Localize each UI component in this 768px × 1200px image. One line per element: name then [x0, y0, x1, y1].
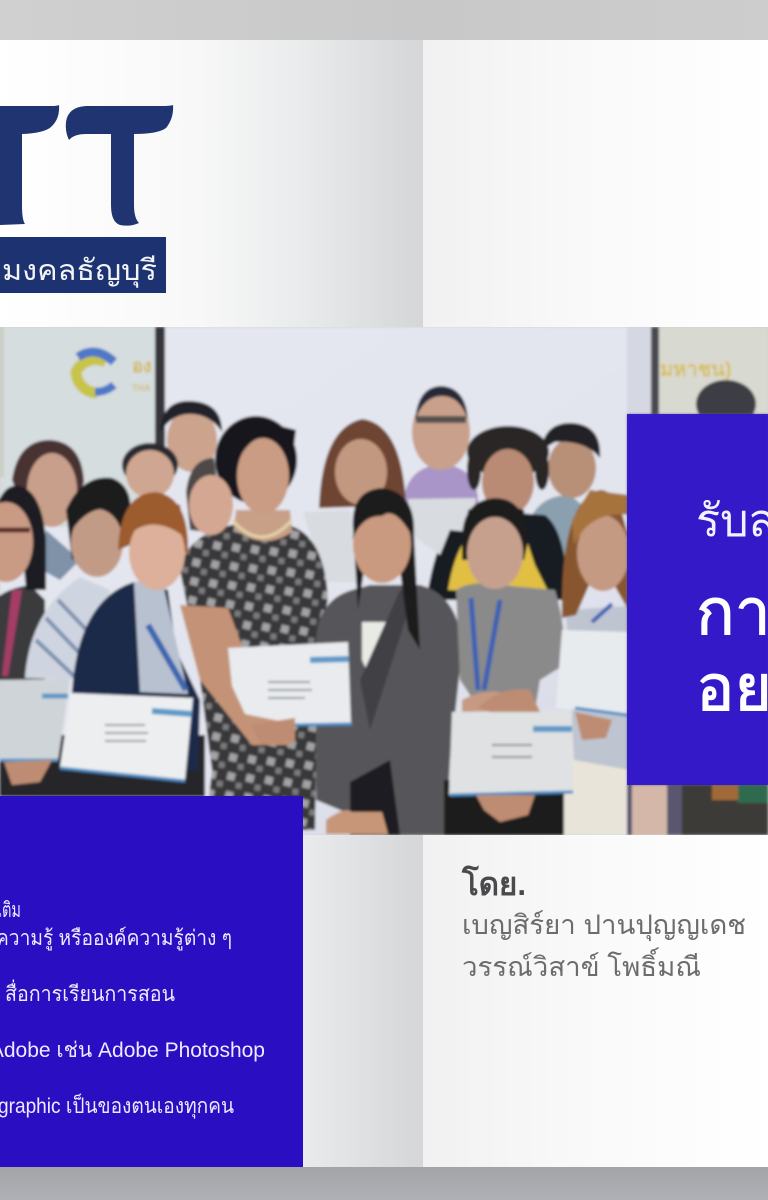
woman with long hair, right	[560, 488, 628, 835]
objectives list: graphic เป็นของตนเองทุกคน	[0, 1092, 234, 1119]
front row right people	[316, 380, 768, 835]
author one: เบญสิร์ยา ปานปุญญเดช	[462, 909, 746, 942]
woman far left, back row	[12, 440, 84, 580]
people behind right box	[627, 380, 768, 835]
main woman in patterned dress	[180, 416, 328, 830]
woman in navy jacket	[72, 492, 200, 770]
small woman between	[186, 458, 233, 535]
woman with glasses far left	[0, 486, 46, 680]
group photo	[0, 327, 768, 835]
wall logo: อง	[132, 356, 152, 376]
back row people	[12, 386, 600, 600]
certificate center-right	[449, 710, 573, 795]
curly hair woman	[428, 426, 568, 600]
objectives list: สื่อการเรียนการสอน	[5, 979, 175, 1006]
background bottom band	[0, 1167, 768, 1200]
wall logo	[76, 352, 732, 393]
logo name bar	[0, 237, 166, 293]
certificate far left	[0, 679, 70, 760]
authors	[461, 865, 746, 982]
wall logo: มหาชน)	[660, 359, 732, 381]
woman in gray polo	[444, 498, 568, 835]
logo name bar: มงคลธัญบุรี	[2, 255, 157, 288]
front row left people	[0, 458, 233, 770]
translucent blue panel	[627, 414, 768, 785]
upper certificates	[303, 498, 476, 582]
authors heading: โดย.	[461, 865, 526, 902]
man left back row	[160, 401, 222, 472]
title box	[627, 414, 768, 785]
left upper page	[0, 40, 423, 327]
objectives box	[0, 796, 303, 1167]
certificate right	[556, 630, 627, 715]
objectives list: ความรู้ หรือองค์ความรู้ต่าง ๆ	[0, 926, 232, 951]
woman in gray blazer	[316, 488, 462, 835]
logo letters TT	[0, 105, 173, 226]
logo	[0, 105, 173, 293]
woman in striped shirt	[25, 478, 131, 680]
brown hair woman	[319, 419, 406, 508]
blue panel	[0, 796, 303, 1167]
right upper page	[423, 40, 768, 327]
man right back row	[530, 423, 600, 560]
certificates	[0, 630, 627, 822]
certificate center-left	[228, 642, 352, 725]
author two: วรรณ์วิสาข์ โพธิ์มณี	[462, 947, 701, 982]
left lower page	[0, 835, 423, 1167]
woman second, back row	[122, 443, 178, 498]
certificate left	[60, 693, 193, 781]
right lower page	[423, 835, 768, 1167]
objectives list	[0, 899, 265, 1119]
hands	[4, 689, 612, 822]
wall logo: THA	[132, 383, 151, 393]
photo wall background	[0, 327, 768, 835]
man with glasses, back row	[404, 386, 478, 510]
background top band	[0, 0, 768, 40]
